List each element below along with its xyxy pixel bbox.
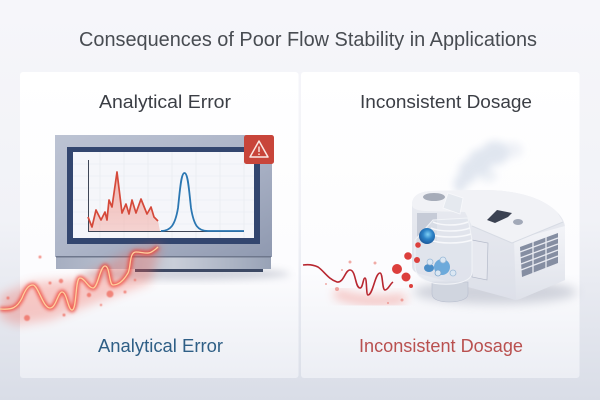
cup lower bowl bbox=[432, 282, 468, 302]
device body bbox=[412, 190, 565, 300]
alert badge bbox=[244, 135, 274, 164]
title: Consequences of Poor Flow Stability in Applications bbox=[79, 29, 537, 51]
left panel heading: Analytical Error bbox=[99, 92, 231, 112]
cup ribs bbox=[430, 222, 472, 243]
left window bbox=[417, 213, 437, 243]
monitor bbox=[55, 135, 290, 280]
dose wave line bbox=[303, 265, 393, 295]
blue clean peak bbox=[161, 173, 244, 231]
top opening bbox=[423, 193, 445, 201]
panel: inconsistent dosage bbox=[301, 72, 580, 378]
mouthpiece bbox=[443, 193, 463, 214]
wave core bbox=[0, 247, 158, 310]
button bbox=[513, 219, 523, 225]
device side face bbox=[514, 226, 565, 299]
inner liquid bubbles bbox=[424, 257, 456, 276]
chart axes bbox=[88, 160, 244, 232]
erratic dose wave bbox=[303, 242, 421, 304]
lid lip bbox=[472, 222, 563, 243]
exclamation mark bbox=[258, 146, 260, 155]
device front panel bbox=[472, 240, 488, 280]
monitor bezel bbox=[67, 147, 260, 244]
left panel caption: Analytical Error bbox=[98, 336, 223, 356]
monitor frame bbox=[55, 135, 272, 257]
device shadow bbox=[413, 280, 577, 304]
monitor base bbox=[56, 256, 271, 269]
panel: analytical error bbox=[0, 72, 298, 378]
left panel card bbox=[20, 72, 298, 378]
monitor shadow bbox=[80, 268, 290, 280]
blue droplet bbox=[419, 228, 435, 244]
right panel caption: Inconsistent Dosage bbox=[359, 336, 523, 356]
nebulizer cup bbox=[415, 193, 472, 302]
red noisy line bbox=[88, 172, 158, 227]
warning triangle bbox=[250, 141, 268, 157]
right panel card bbox=[301, 72, 580, 378]
wave outer glow bbox=[0, 247, 158, 310]
right panel heading: Inconsistent Dosage bbox=[360, 92, 532, 112]
wave particles bbox=[6, 256, 136, 321]
nebulizer bbox=[412, 141, 577, 304]
dose wave glow bbox=[335, 293, 405, 301]
wave glow haze bbox=[0, 243, 163, 325]
vent grill bbox=[520, 233, 558, 277]
unstable flow wave bbox=[0, 243, 163, 325]
cup main body bbox=[415, 218, 472, 284]
chart bbox=[88, 160, 244, 232]
display bbox=[487, 210, 512, 223]
monitor screen bbox=[73, 152, 254, 238]
red droplets bbox=[392, 242, 421, 288]
mist bbox=[454, 141, 523, 193]
device lid bbox=[412, 190, 563, 243]
dose wave particles bbox=[325, 260, 404, 304]
red area bbox=[88, 172, 160, 231]
